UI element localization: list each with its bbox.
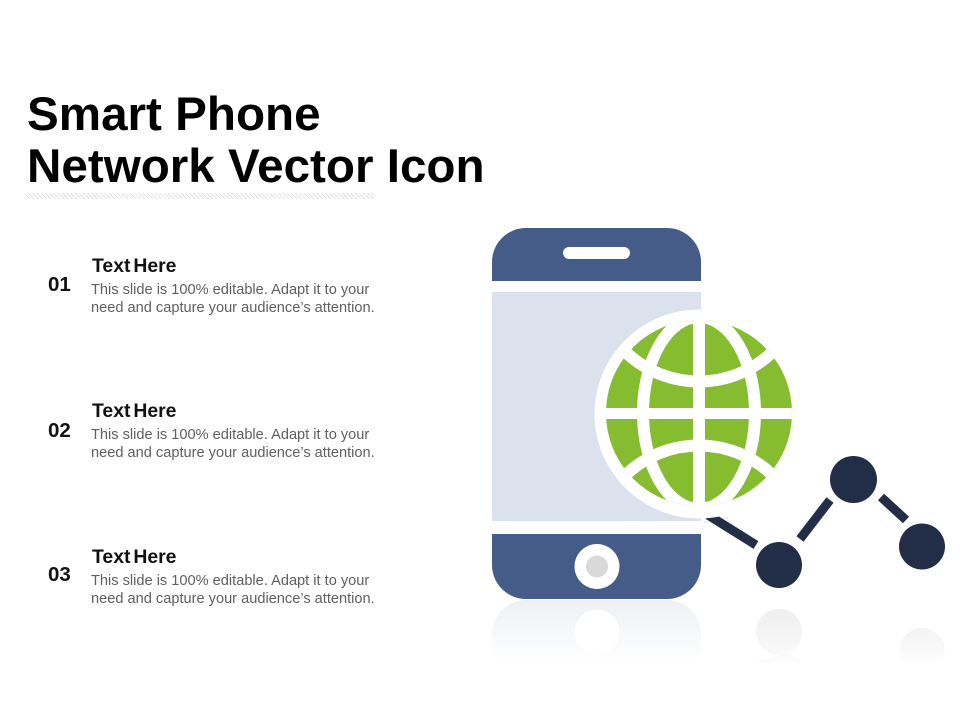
icon: phone reflection [492, 600, 701, 662]
text block 03 [48, 546, 375, 607]
text block 02 [48, 400, 375, 461]
description 02 [91, 427, 375, 461]
icon: globe [594, 310, 792, 518]
description 03: need and capture your audience’s attention. [91, 591, 375, 607]
description 01: This slide is 100% editable. Adapt it to your [91, 282, 369, 298]
number 01: 01 [48, 273, 71, 296]
phone screen [492, 292, 701, 521]
phone bottom bezel [492, 534, 701, 599]
network nodes [756, 456, 945, 588]
description 01 [91, 282, 375, 316]
title [27, 88, 485, 193]
icon: smartphone [492, 228, 701, 599]
title: Smart Phone [27, 88, 321, 141]
heading 03: Text Here [92, 546, 176, 568]
heading 02: Text Here [92, 400, 176, 422]
network connectors [708, 497, 906, 545]
description 03: This slide is 100% editable. Adapt it to your [91, 573, 369, 589]
description 02: This slide is 100% editable. Adapt it to your [91, 427, 369, 443]
title: Network Vector Icon [27, 140, 485, 193]
phone speaker [563, 247, 630, 259]
description 01: need and capture your audience’s attention. [91, 300, 375, 316]
heading 01: Text Here [92, 255, 176, 277]
phone top bezel [492, 228, 701, 281]
number 02: 02 [48, 419, 71, 442]
text block 01 [48, 255, 375, 316]
number 03: 03 [48, 563, 71, 586]
illustration: phone, globe and network [492, 228, 945, 644]
phone home button [574, 544, 620, 589]
icon: network node reflections [738, 609, 945, 674]
description 03 [91, 573, 375, 607]
description 02: need and capture your audience’s attention. [91, 445, 375, 461]
